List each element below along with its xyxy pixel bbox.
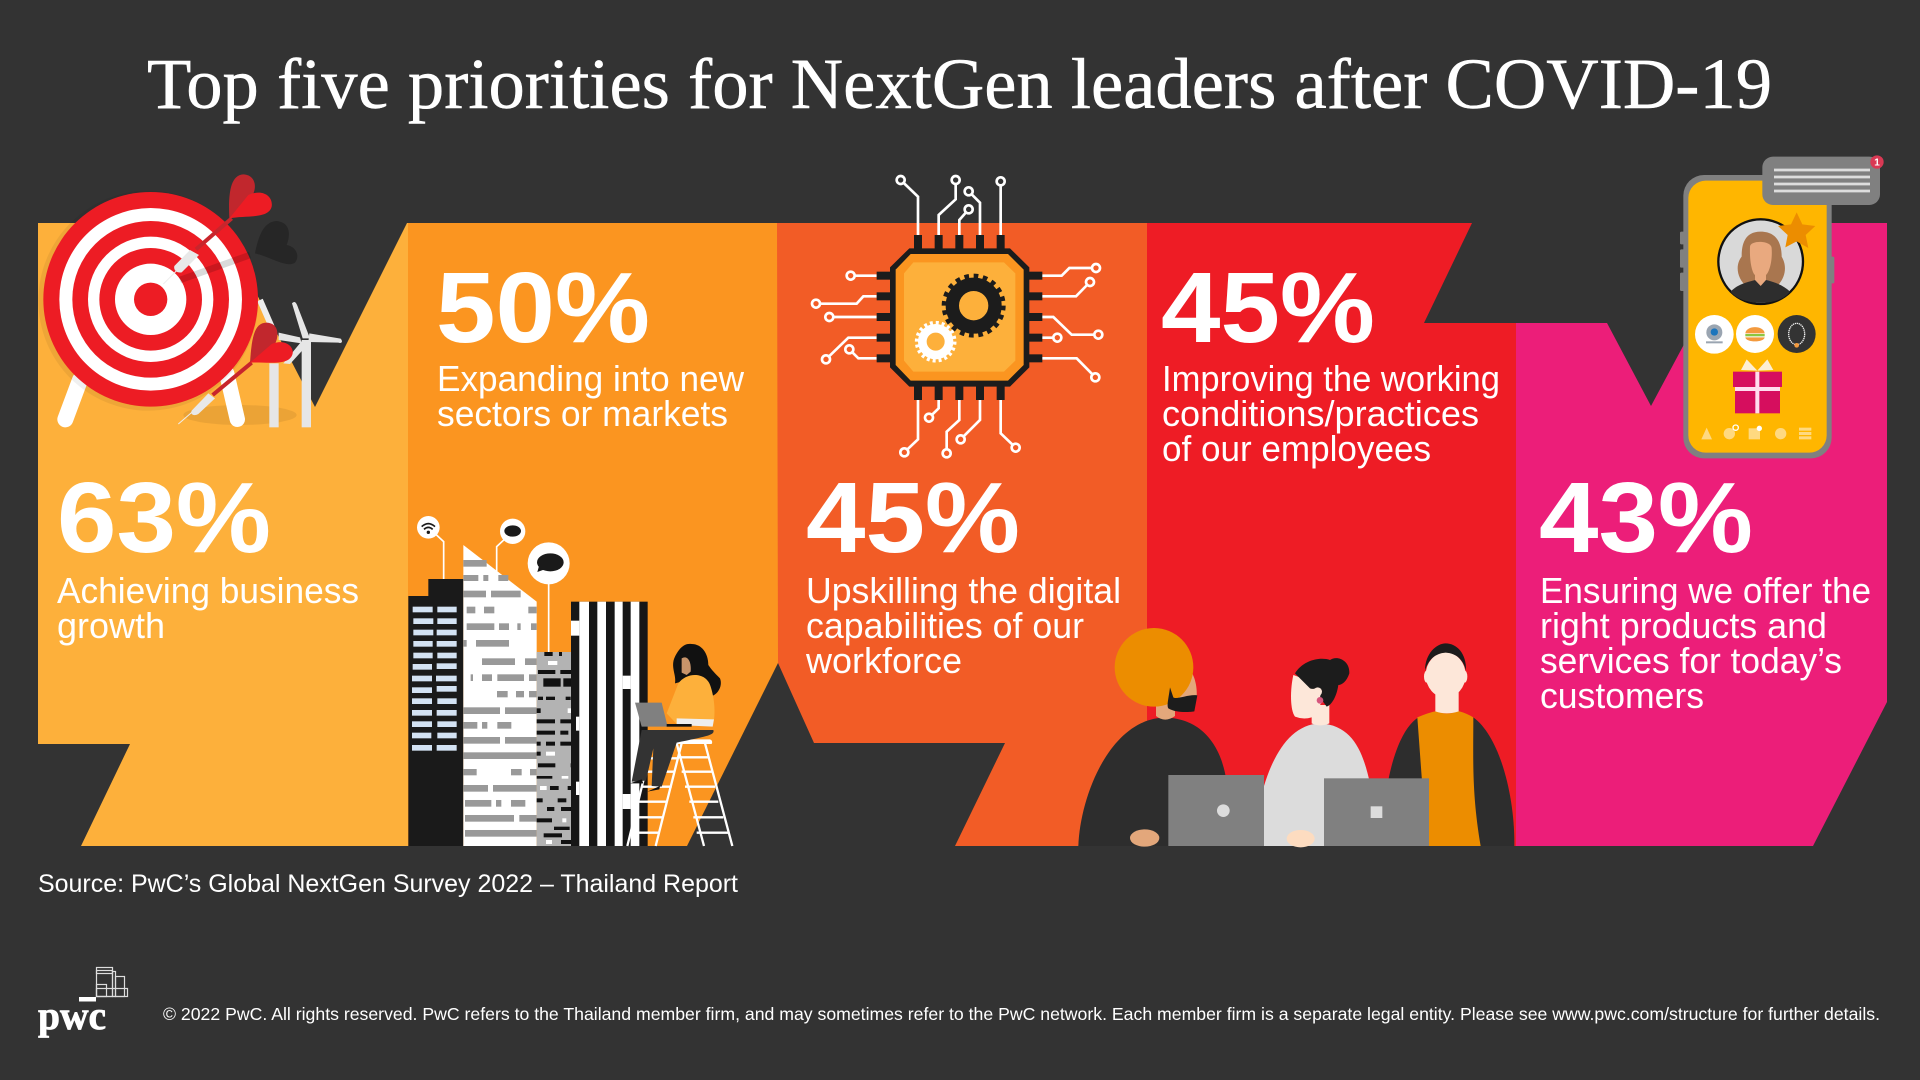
text: improving the working conditions: Improving the working xyxy=(1162,358,1500,399)
icon: circuit chip with gears xyxy=(812,176,1102,457)
text: upskilling the digital capabilities: workforce xyxy=(805,640,962,681)
text: improving the working conditions xyxy=(1162,358,1500,469)
title: Top five priorities for NextGen leaders after COVID-19 xyxy=(147,44,1772,124)
logo: PwC: pwc xyxy=(38,993,106,1038)
panel: right products and services xyxy=(1516,155,1887,846)
text: ensuring right products and services: customers xyxy=(1540,675,1704,716)
panel: achieving business growth xyxy=(38,174,409,846)
text: achieving business growth: growth xyxy=(57,605,165,646)
statistic: 50%: 50% xyxy=(436,252,650,364)
text: achieving business growth: Achieving business xyxy=(57,570,359,611)
text: expanding into new sectors or markets: sectors or markets xyxy=(437,393,728,434)
text: upskilling the digital capabilities: capabilities of our xyxy=(806,605,1084,646)
illustration: city buildings and woman on ladder xyxy=(408,516,732,846)
text: ensuring right products and services: Ensuring we offer the xyxy=(1540,570,1871,611)
text: expanding into new sectors or markets xyxy=(437,358,745,434)
source note: Source: PwC’s Global NextGen Survey 2022 – Thailand Report xyxy=(38,870,738,898)
statistic: 45% employees: 45% xyxy=(1161,252,1375,364)
illustration: smartphone with customer profile xyxy=(1680,155,1884,458)
panel: expanding into new sectors xyxy=(408,223,778,846)
illustration: three employees with laptops xyxy=(1078,628,1514,847)
text: ensuring right products and services xyxy=(1540,570,1871,716)
copyright footer: © 2022 PwC. All rights reserved. PwC refers to the Thailand member firm, and may sometimes refer to the PwC network. Each member firm is a separate legal entity. Please see www.pwc.com/structure for further details. xyxy=(163,1004,1880,1024)
panel: upskilling digital capabilities xyxy=(777,176,1148,846)
panel: improving working conditions xyxy=(1078,223,1517,847)
statistic: 43%: 43% xyxy=(1539,462,1753,574)
illustration: smartphone with customer profile: 1 xyxy=(1874,158,1880,169)
statistic: 63%: 63% xyxy=(57,462,271,574)
text: ensuring right products and services: right products and xyxy=(1540,605,1827,646)
text: improving the working conditions: conditions/practices xyxy=(1162,393,1479,434)
text: upskilling the digital capabilities: Upskilling the digital xyxy=(806,570,1121,611)
text: upskilling the digital capabilities xyxy=(805,570,1121,681)
text: achieving business growth xyxy=(57,570,359,646)
text: expanding into new sectors or markets: Expanding into new xyxy=(437,358,745,399)
icon: dartboard with darts and wind turbines xyxy=(38,174,342,427)
text: improving the working conditions: of our employees xyxy=(1162,428,1431,469)
statistic: 45% digital: 45% xyxy=(806,462,1020,574)
text: ensuring right products and services: services for today’s xyxy=(1540,640,1842,681)
logo: PwC xyxy=(38,968,128,1038)
